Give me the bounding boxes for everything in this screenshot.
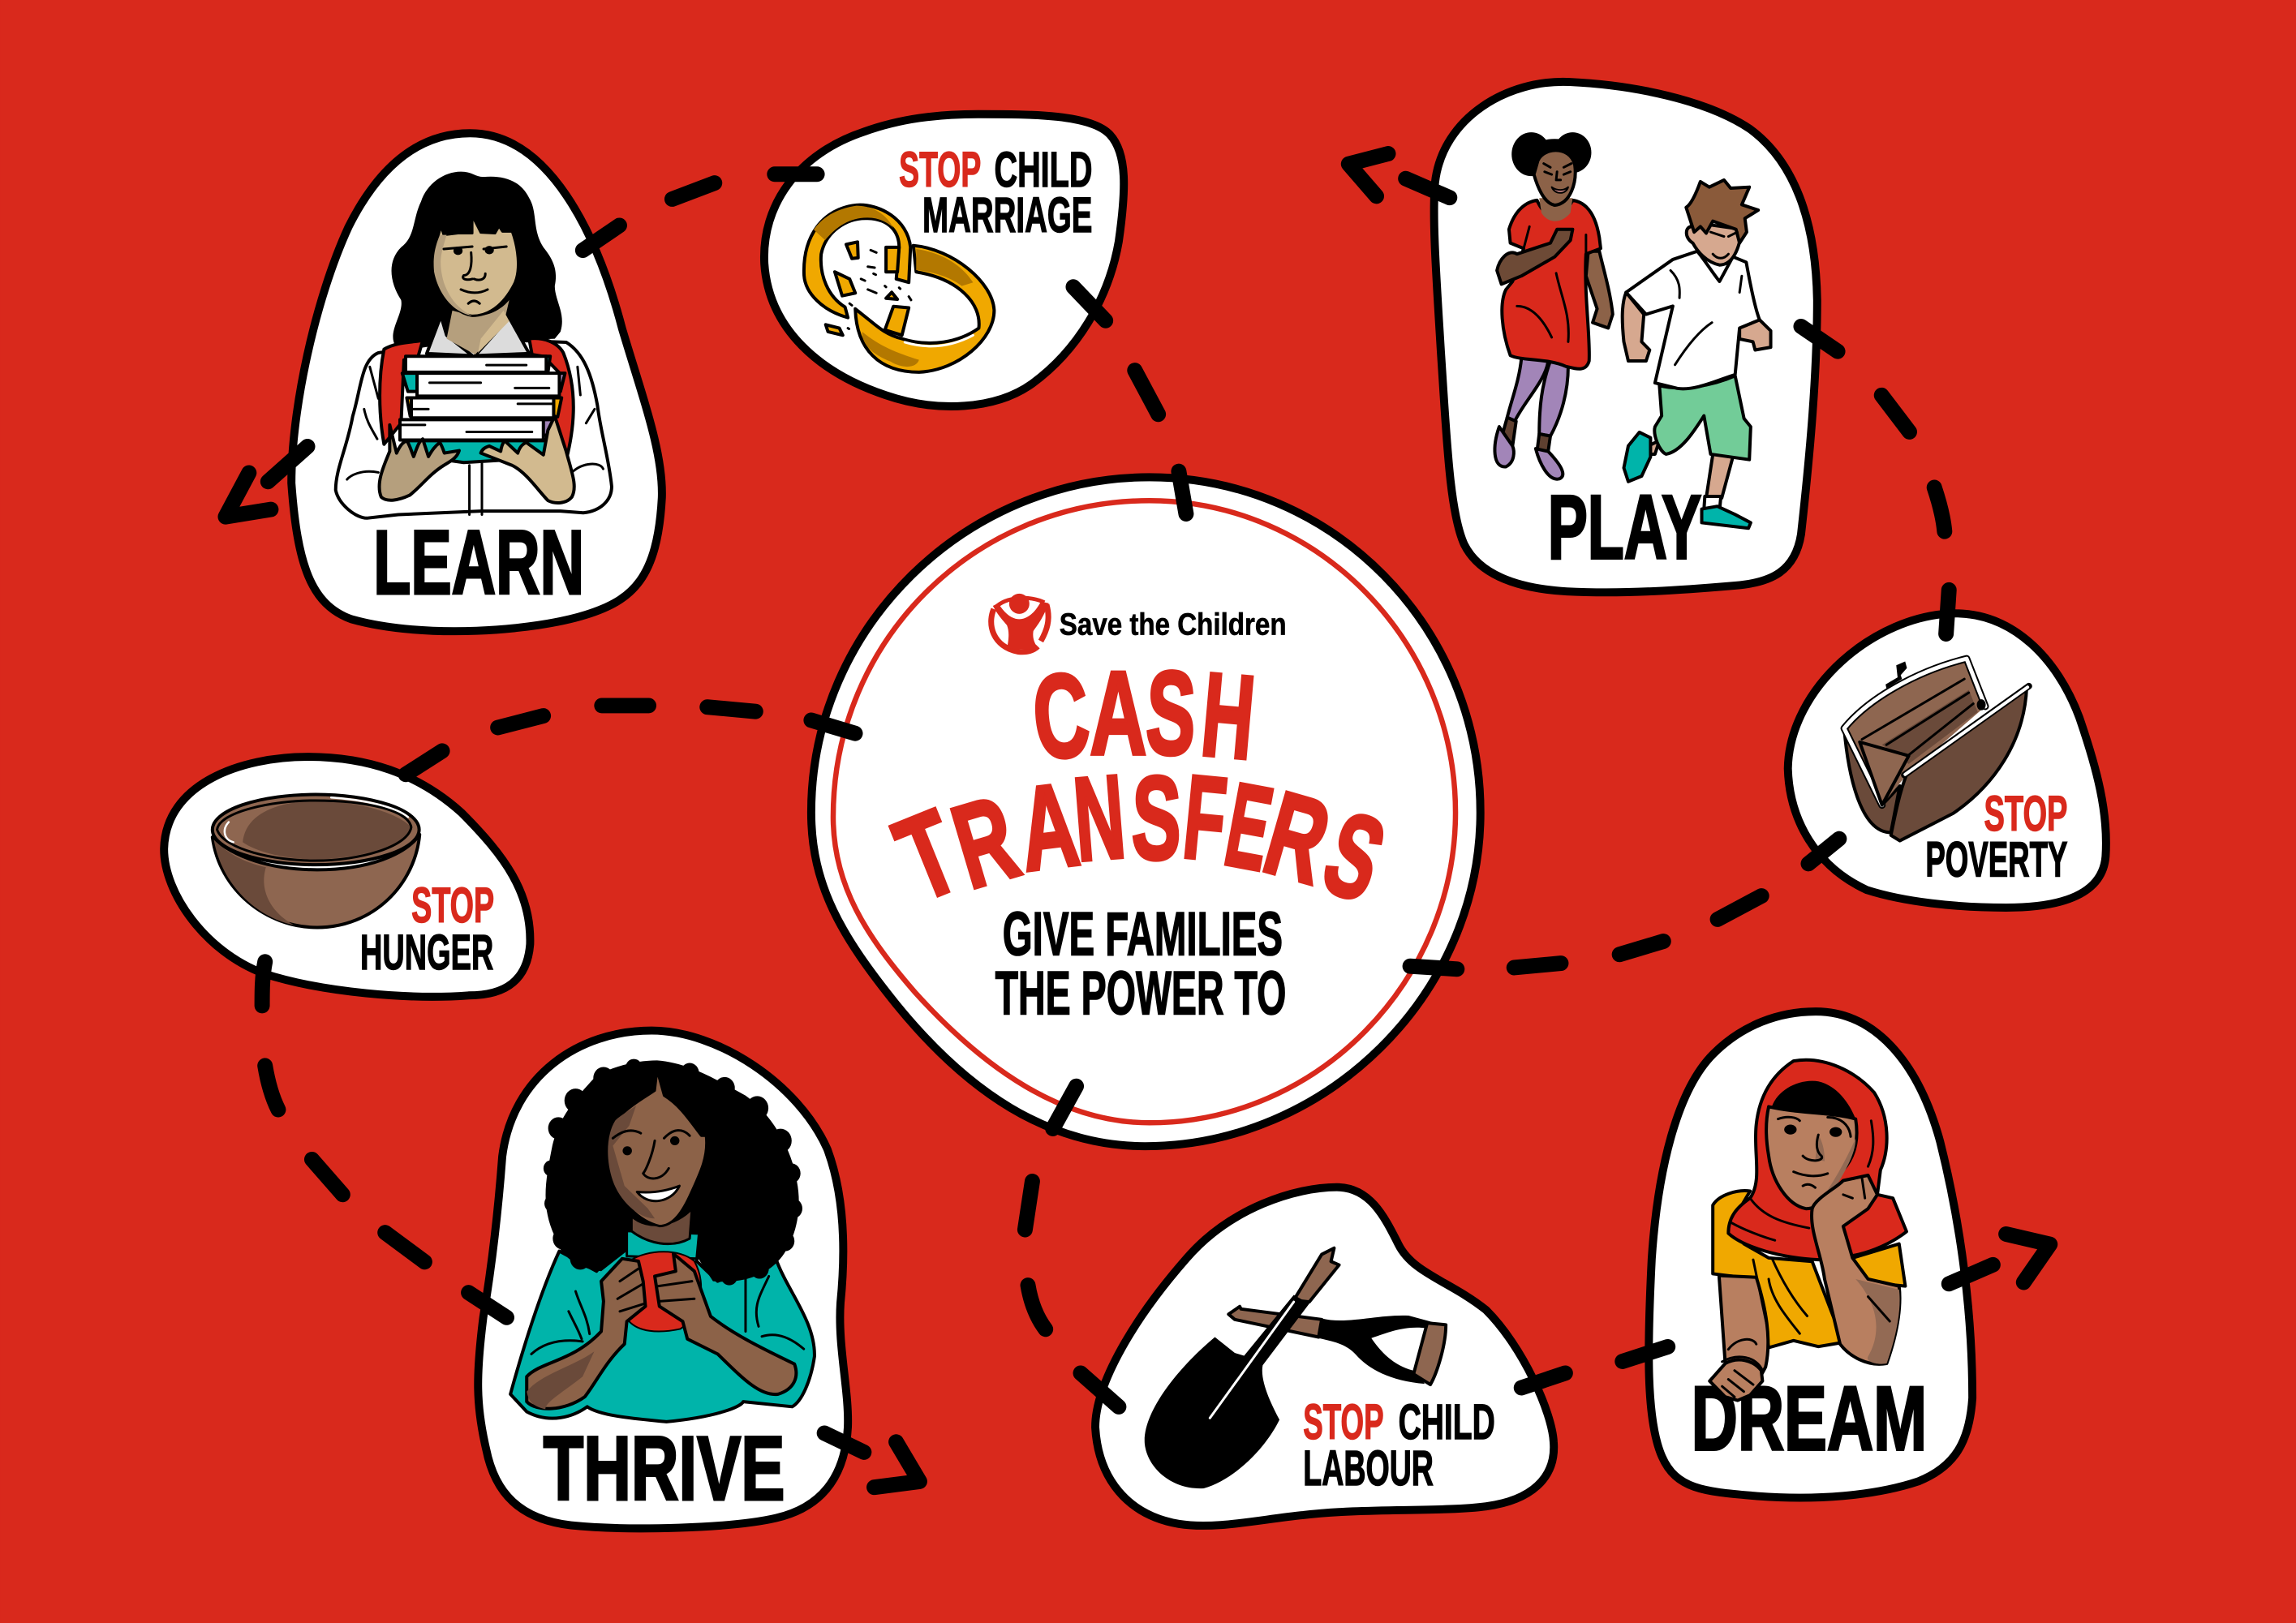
panel: stop child labour [1095,1187,1554,1526]
title: transfers: R [1252,767,1343,910]
icon: empty purse [1844,659,2029,841]
marriage label: STOP [899,142,981,198]
arrow: thrive exit [824,1433,919,1488]
hunger bubble [164,757,530,997]
subtitle: GIVE FAMILIES [1003,900,1283,969]
icon: student holding books [336,172,612,518]
icon: broken shovel [1145,1248,1446,1488]
panel: stop poverty [1788,613,2106,908]
panel: dream [1649,1011,1972,1498]
title: transfers: F [1178,751,1232,887]
learn label: LEARN [373,512,584,613]
poverty label: STOP [1984,786,2067,842]
thrive label: THRIVE [544,1418,785,1519]
arrow: learn exit [226,446,307,517]
panel: thrive [478,1031,848,1528]
marriage label [899,142,1092,243]
poverty label [1925,786,2067,888]
title: transfers: R [939,771,1031,914]
labour bubble [1095,1187,1554,1526]
icon: two children running [1494,132,1771,528]
title: cash [1028,646,1260,785]
arrow: centre to poverty [1410,839,1839,969]
play label: PLAY [1548,477,1701,578]
poverty bubble [1788,613,2106,908]
arrow: dream exit [1949,1234,2050,1284]
arrow: centre to hunger [406,706,855,775]
title: cash: A [1090,647,1146,779]
subtitle: THE POWER TO [995,959,1286,1028]
learn bubble [291,133,662,631]
poverty label: POVERTY [1925,832,2067,888]
marriage label: CHILD [994,142,1092,198]
arrow: centre to labour [1025,1086,1119,1406]
title: transfers: E [1216,758,1281,895]
hunger label: STOP [411,878,494,934]
marriage label: MARRIAGE [922,187,1092,243]
arrow: labour to dream [1521,1346,1668,1388]
logo: save the children [991,594,1287,652]
hunger label: HUNGER [360,925,493,981]
labour label: CHILD [1399,1394,1495,1450]
circle inner red ring [833,500,1455,1123]
panel: learn [291,133,662,631]
arrow: poverty to play [1801,326,1949,633]
icon: broken gold ring [804,205,994,372]
play bubble [1434,82,1817,592]
arrow: hunger to thrive [262,962,506,1317]
icon: woman with curly hair holding a red cup [510,1059,815,1422]
arrow: play exit [1348,154,1450,198]
labour label: STOP [1303,1394,1384,1450]
organisation name: Save the Children [1060,608,1287,642]
title: transfers: T [879,784,976,926]
circle outer ring [811,477,1481,1146]
title: transfers: N [1069,751,1129,887]
icon: empty bowl [213,795,419,927]
title: transfers: S [1131,751,1182,885]
hunger label [360,878,494,981]
title: cash: S [1144,646,1197,780]
labour label: LABOUR [1303,1441,1434,1496]
dream label: DREAM [1692,1368,1927,1470]
labour label [1303,1394,1495,1496]
dashed route arrows [226,154,2050,1488]
panel: central cash transfers circle [811,477,1481,1146]
title: transfers: S [1309,786,1400,927]
title: cash: C [1028,648,1094,785]
panel: stop hunger [164,757,530,997]
panel: stop child marriage [764,114,1124,406]
marriage bubble [764,114,1124,406]
thrive bubble [478,1031,848,1528]
dream bubble [1649,1011,1972,1498]
title: transfers [879,751,1400,927]
logo emblem [991,594,1049,652]
arrow: centre to marriage [1073,287,1186,513]
title: transfers: A [1013,758,1085,896]
subtitle [995,900,1286,1028]
panel: play [1434,82,1817,592]
title: cash: H [1197,647,1260,784]
icon: girl in red headscarf dreaming [1709,1060,1907,1401]
arrow: marriage to learn [583,174,817,251]
